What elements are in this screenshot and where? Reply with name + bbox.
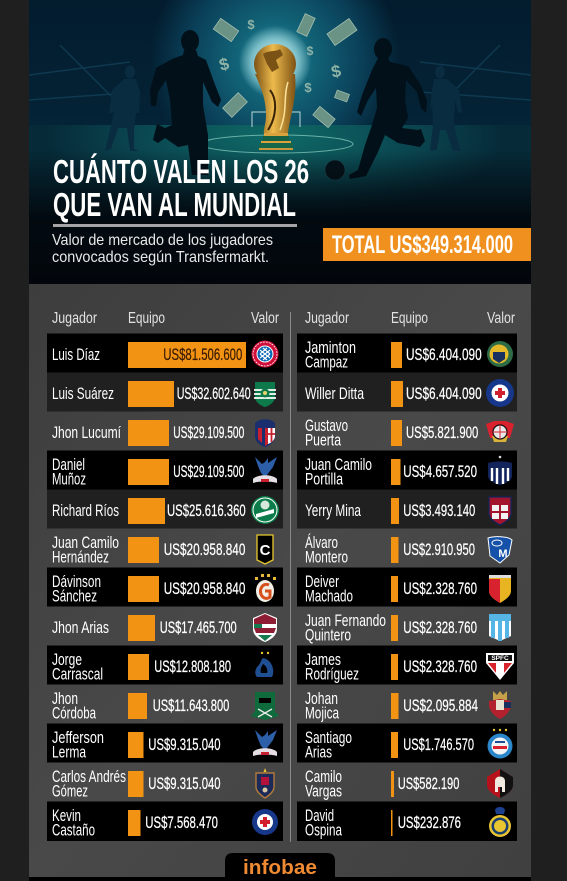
left table headers: Valor [251,310,279,327]
title [53,153,309,223]
badge: Dinamo Moscow [255,652,273,677]
row: Yerry Mina: US$3.493.140 [403,502,475,520]
money bills [213,14,357,128]
row: Jhon Lucumí: US$29.109.500 [173,424,244,442]
row: David Ospina [297,802,517,841]
row: Álvaro Montero: Álvaro [305,533,338,552]
dollar signs: $ [304,80,312,95]
row: Willer Ditta: US$6.404.090 [406,385,482,403]
subtitle: convocados según Transfermarkt. [52,249,269,266]
row: Jorge Carrascal: Carrascal [52,666,103,684]
row: Juan Camilo Hernández: Hernández [52,548,109,566]
dollar signs: $ [217,54,232,75]
row: Daniel Muñoz [47,450,283,490]
row: Richard Ríos [47,490,283,528]
row: Juan Camilo Portilla: Portilla [305,470,344,488]
badge: Millonarios: M [498,548,508,560]
row: Dávinson Sánchez: US$20.958.840 [164,580,245,598]
left table [47,334,283,841]
badge: Crystal Palace [253,457,277,483]
row: Carlos Andrés Gómez: US$9.315.040 [148,775,221,793]
title underline [53,224,297,227]
row: Jorge Carrascal: US$12.808.180 [154,658,231,676]
infobae logo: infobae [243,856,317,879]
badge: Lens [489,575,511,603]
row: Álvaro Montero: US$2.910.950 [403,541,475,559]
row: Carlos Andrés Gómez: Gómez [52,782,88,800]
row: Johan Mojica: US$2.095.884 [403,697,478,715]
row: Luis Suárez: US$32.602.640 [177,385,251,403]
row: Juan Fernando Quintero: Juan Fernando [305,612,386,630]
bottom strip [29,877,531,881]
row: Deiver Machado [297,568,517,606]
right table headers: Jugador [305,310,349,327]
row: Juan Camilo Portilla: Juan Camilo [305,456,372,474]
subtitle [52,232,273,266]
row: James Rodríguez [297,646,517,684]
row: Johan Mojica: Johan [305,690,338,708]
centre circle [201,135,353,153]
row: Richard Ríos: Richard Ríos [52,502,119,520]
row: James Rodríguez: Rodríguez [305,666,359,684]
row: David Ospina: Ospina [305,822,343,840]
row: Jefferson Lerma: Lerma [52,744,87,762]
badge: Palmeiras [251,496,279,524]
row: Dávinson Sánchez [47,568,283,606]
row: Gustavo Puerta: Puerta [305,432,342,450]
row: Juan Fernando Quintero [305,612,511,644]
main player right [349,38,427,179]
dollar signs [217,17,343,95]
row: Juan Camilo Hernández: US$20.958.840 [164,541,245,559]
badge: Atlas [487,769,513,798]
row: Jaminton Campaz: Campaz [305,354,348,372]
row: Jhon Córdoba [52,690,279,722]
badge: Talleres [488,456,512,485]
row: Santiago Arias: US$1.746.570 [403,736,474,754]
row: Álvaro Montero [305,533,512,566]
row: Álvaro Montero: Montero [305,548,348,566]
badge: Cruz Azul [252,809,278,835]
row: Jorge Carrascal [47,646,283,684]
row: Santiago Arias [297,724,517,762]
badge: Sporting [254,382,276,407]
main player left [150,30,221,175]
row: Kevin Castaño [47,802,283,841]
row: Santiago Arias: Arias [305,744,332,762]
badge: Millonarios [488,537,512,563]
row: Juan Fernando Quintero: US$2.328.760 [403,619,477,637]
row: Deiver Machado: Machado [305,588,353,606]
data panel [29,284,531,877]
row: Kevin Castaño: Kevin [52,807,81,825]
badge: São Paulo: SPFC [491,655,509,662]
badge: Osasuna [489,691,511,719]
row: Johan Mojica [305,690,511,722]
row: Daniel Muñoz: Daniel [52,456,85,474]
goal [252,112,300,127]
row: Jaminton Campaz: Jaminton [305,339,356,357]
row: Juan Camilo Portilla: US$4.657.520 [403,463,477,481]
row: Jhon Córdoba: US$11.643.800 [153,697,229,715]
row: Daniel Muñoz: Muñoz [52,470,86,488]
row: Camilo Vargas: US$582.190 [398,775,459,793]
badge: Columbus Crew [257,535,273,564]
left table headers [52,310,279,327]
row: Camilo Vargas: Vargas [305,782,342,800]
row: Jefferson Lerma: Jefferson [52,729,104,747]
badge: Rosario Central [487,341,513,367]
row: Juan Camilo Hernández: Juan Camilo [52,534,119,552]
row: Jhon Lucumí [52,419,275,447]
row: Carlos Andrés Gómez: Carlos Andrés [52,768,126,786]
row: Juan Camilo Portilla [297,450,517,490]
row: Camilo Vargas [305,768,513,800]
infobae logo [225,853,335,879]
row: Luis Suárez: Luis Suárez [52,385,114,403]
row: Johan Mojica: Mojica [305,704,340,722]
badge: Bologna [255,419,275,447]
row: Jhon Córdoba: Jhon [52,690,78,708]
row: Gustavo Puerta: Gustavo [305,417,348,435]
dollar signs: $ [329,61,343,82]
row: Jorge Carrascal: Jorge [52,651,82,669]
row: Dávinson Sánchez: Dávinson [52,573,101,591]
badge: Galatasaray [255,574,276,602]
row: Jaminton Campaz: US$6.404.090 [406,346,482,364]
badge: Racing [489,614,511,641]
row: Luis Díaz [47,334,283,373]
row: Kevin Castaño: Castaño [52,822,95,840]
badge: Cagliari [489,497,511,525]
row: Gustavo Puerta [305,417,514,450]
row: Gustavo Puerta: US$5.821.900 [406,424,478,442]
right table headers [305,310,515,327]
badge: Bayern [252,340,278,368]
row: Jhon Arias [52,613,277,642]
badge: Leverkusen [486,421,514,442]
row: Kevin Castaño: US$7.568.470 [145,814,218,832]
row: Richard Ríos: US$25.616.360 [167,502,246,520]
badge: Columbus Crew: C [260,542,271,559]
row: Willer Ditta [297,372,517,412]
ball [325,160,345,180]
row: Jhon Arias: US$17.465.700 [160,619,237,637]
badge: Crystal Palace [253,730,277,756]
dollar signs: $ [247,17,255,32]
row: Yerry Mina [297,490,517,528]
badge: Cruz Azul [486,379,514,407]
badge: Fluminense [253,613,277,642]
left table headers: Equipo [128,310,165,327]
badge: São Paulo [486,653,514,680]
row: Jaminton Campaz [297,334,517,373]
column divider [290,312,291,842]
row: Juan Camilo Hernández [52,534,273,566]
right table headers: Equipo [391,310,428,327]
right table headers: Valor [487,310,515,327]
row: David Ospina: David [305,807,334,825]
row: Carlos Andrés Gómez [52,768,274,800]
hero illustration [29,0,531,284]
row: Luis Díaz: US$81.506.600 [163,346,242,364]
row: Willer Ditta: Willer Ditta [305,385,365,403]
row: James Rodríguez: US$2.328.760 [403,658,477,676]
row: Camilo Vargas: Camilo [305,768,342,786]
row: Luis Díaz: Luis Díaz [52,346,100,364]
title: QUE VAN AL MUNDIAL [53,186,296,223]
distant player right [430,66,462,151]
row: Jefferson Lerma: US$9.315.040 [148,736,221,754]
row: Juan Fernando Quintero: Quintero [305,626,351,644]
row: Jhon Córdoba: Córdoba [52,704,97,722]
badge: Krasnodar [251,692,279,720]
row: Jhon Lucumí: Jhon Lucumí [52,424,121,442]
row: David Ospina: US$232.876 [398,814,461,832]
row: Santiago Arias: Santiago [305,729,352,747]
dollar signs: $ [307,44,314,58]
row: Deiver Machado: US$2.328.760 [403,580,477,598]
row: Yerry Mina: Yerry Mina [305,502,362,520]
row: James Rodríguez: James [305,651,341,669]
trophy glow [239,26,311,98]
badge: Real Salt Lake [256,768,274,798]
row: Jefferson Lerma [47,724,283,762]
left table headers: Jugador [52,310,97,327]
title: CUÁNTO VALEN LOS 26 [53,153,309,190]
subtitle: Valor de mercado de los jugadores [52,232,273,249]
row: Dávinson Sánchez: Sánchez [52,588,97,606]
row: Deiver Machado: Deiver [305,573,339,591]
badge: Al Nassr [489,807,511,837]
trophy [254,44,296,150]
distant player left [105,66,140,151]
right table [297,334,517,841]
row: Luis Suárez [47,372,283,412]
row: Jhon Arias: Jhon Arias [52,619,109,637]
badge: Bahia [488,729,512,758]
row: Daniel Muñoz: US$29.109.500 [173,463,244,481]
